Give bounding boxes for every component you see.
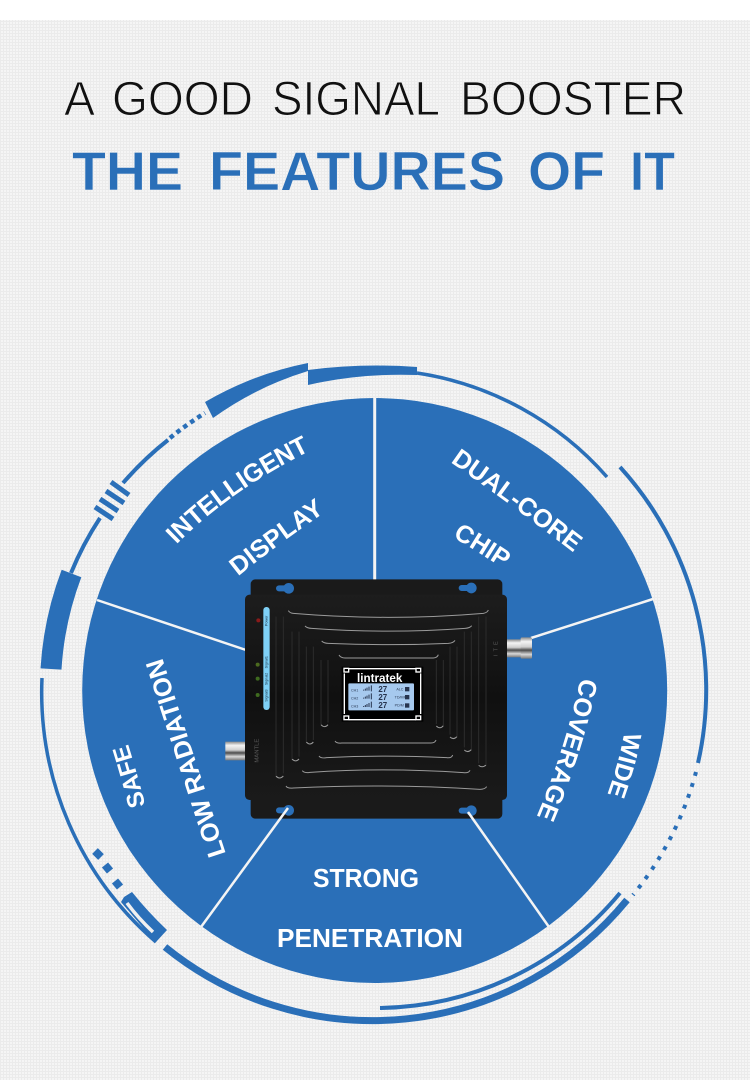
label: strong penetration <box>277 865 463 953</box>
title: A GOOD SIGNAL BOOSTER: GOOD <box>112 73 253 126</box>
status label strip <box>263 607 270 710</box>
enclosure body <box>245 595 507 800</box>
label: dual-core chip: CHIP <box>456 525 510 562</box>
label: wide coverage: WIDE <box>608 735 642 798</box>
subtitle: THE FEATURES OF IT: OF <box>528 140 605 202</box>
label: intelligent display: INTELLIGENT <box>165 435 305 544</box>
mounting plate <box>251 579 502 819</box>
LCD screen: 27 <box>378 685 388 694</box>
LCD display <box>342 667 423 722</box>
label: safe low radiation <box>112 659 226 858</box>
label: intelligent display: DISPLAY <box>228 498 320 576</box>
decorative outer ring <box>42 363 706 1021</box>
status label strip: Power <box>265 615 269 626</box>
label: safe low radiation: LOW RADIATION <box>146 659 226 858</box>
mounting keyholes <box>276 583 477 816</box>
label: strong penetration: PENETRATION <box>277 925 463 953</box>
status label strip: Signal3 <box>265 689 269 702</box>
LCD screen: CH2 <box>351 696 358 700</box>
LCD screen: CH1 <box>351 688 358 692</box>
LCD screen: PD/M <box>395 704 404 708</box>
lower wheel dividers <box>201 808 549 927</box>
label: strong penetration: STRONG <box>313 865 419 893</box>
label: dual-core chip: DUAL-CORE <box>452 448 583 552</box>
panel: blue feature wheel <box>82 398 667 983</box>
device: signal booster <box>225 579 532 819</box>
embossed grooves <box>276 610 488 789</box>
LCD screen: ALC <box>396 687 404 691</box>
label: safe low radiation: SAFE <box>112 744 144 808</box>
subtitle: THE FEATURES OF IT: FEATURES <box>209 140 505 202</box>
subtitle: THE FEATURES OF IT: IT <box>630 140 675 202</box>
icon: left antenna connector <box>225 742 245 760</box>
LCD screen: TD/MP <box>395 695 407 699</box>
label: wide coverage <box>537 680 642 822</box>
port labels: ITE <box>494 641 500 656</box>
brand logo: lintratek <box>357 672 403 685</box>
label: wide coverage: COVERAGE <box>537 680 596 822</box>
port labels <box>255 641 500 763</box>
subtitle: THE FEATURES OF IT: THE <box>72 140 183 202</box>
LCD screen: 27 <box>378 701 388 710</box>
title: A GOOD SIGNAL BOOSTER: A <box>64 73 95 126</box>
title: A GOOD SIGNAL BOOSTER: BOOSTER <box>460 73 686 126</box>
subtitle: THE FEATURES OF IT <box>72 140 675 202</box>
status label strip: Signal2 <box>265 673 269 685</box>
port labels: MANTLE <box>255 738 261 763</box>
LCD screen <box>348 683 414 710</box>
title: A GOOD SIGNAL BOOSTER: SIGNAL <box>272 73 440 126</box>
LCD screen: CH3 <box>351 705 358 709</box>
white wheel dividers <box>97 398 653 650</box>
LCD screen: 27 <box>378 693 388 702</box>
title: A GOOD SIGNAL BOOSTER <box>64 73 686 126</box>
status label strip: Signal1 <box>265 656 269 668</box>
status LEDs <box>256 618 260 697</box>
icon: right antenna connector <box>506 637 532 659</box>
